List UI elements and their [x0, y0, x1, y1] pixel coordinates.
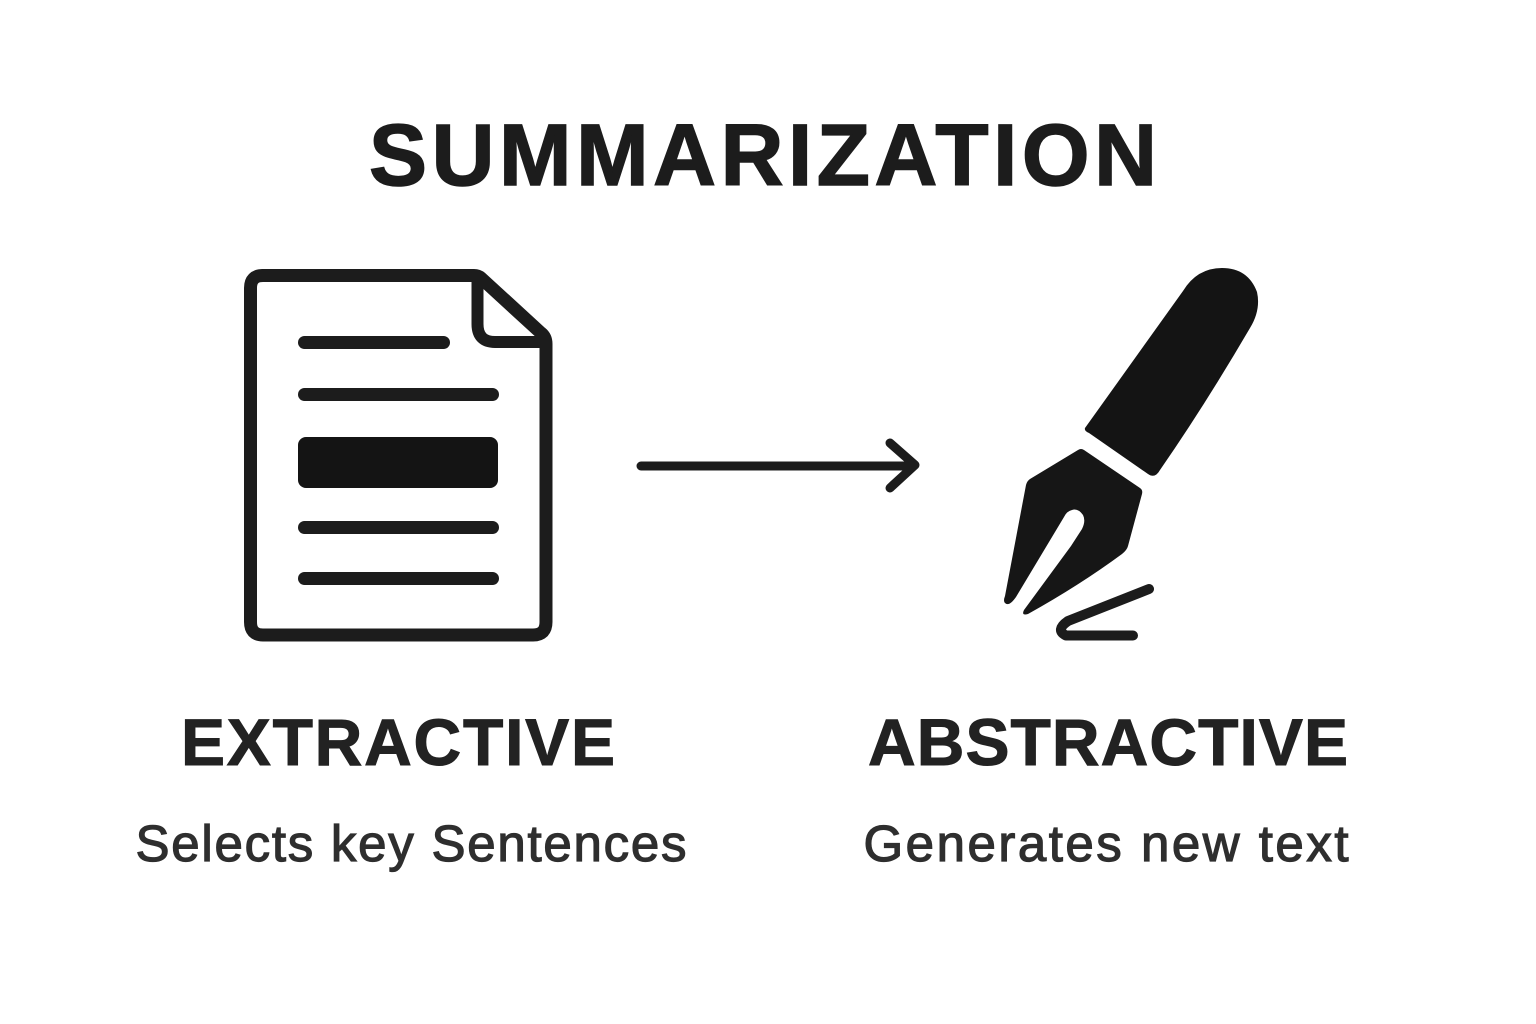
icon: document: [250, 276, 546, 635]
heading: abstractive: ABSTRACTIVE: [868, 705, 1348, 779]
text: abstractive description: Generates new text: [864, 815, 1348, 872]
text: extractive description: Selects key Sentences: [136, 815, 686, 872]
title: SUMMARIZATION: [369, 107, 1157, 204]
heading: extractive: EXTRACTIVE: [181, 705, 615, 779]
icon: fountain pen: [1004, 268, 1258, 636]
arrow: [641, 443, 915, 488]
